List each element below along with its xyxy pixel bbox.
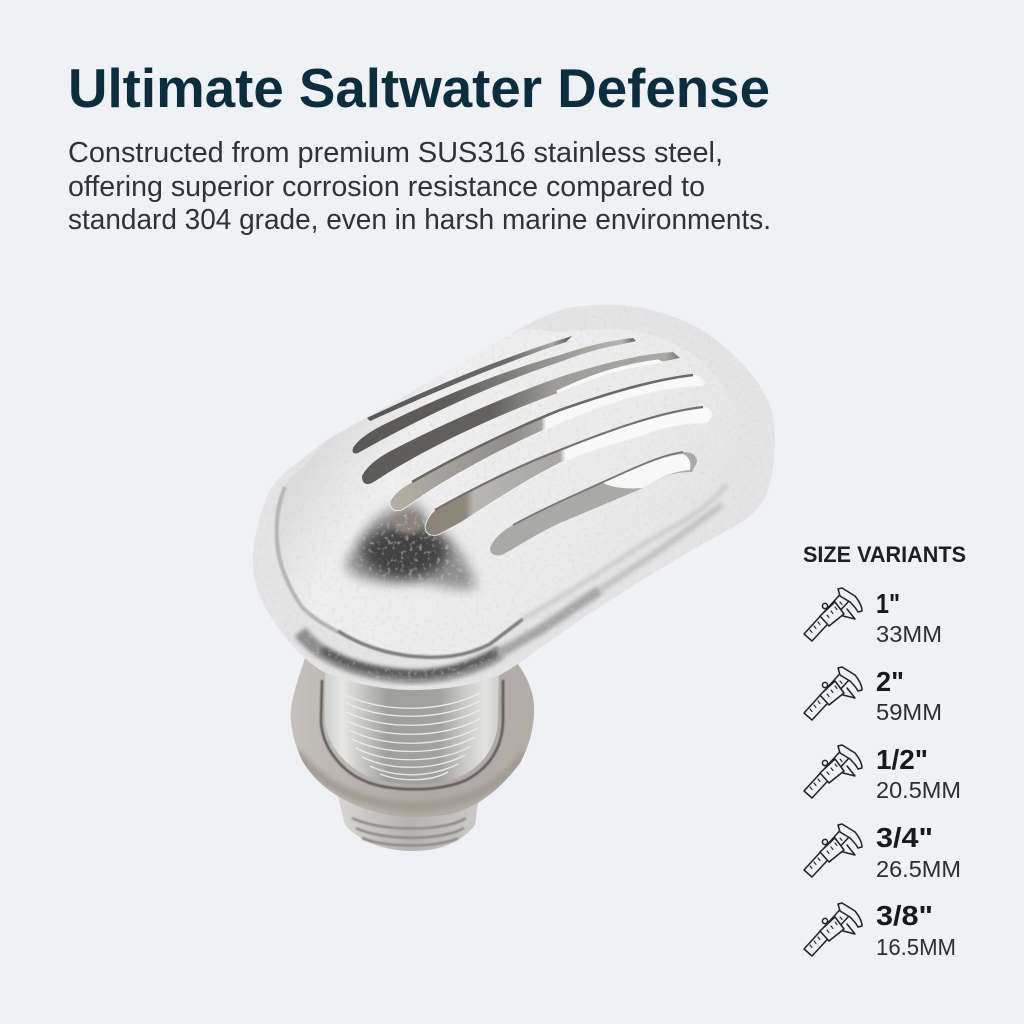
size 1 inch: [804, 588, 942, 647]
slot 4 upper shadow: [412, 375, 693, 482]
size 1 inch: 1": [876, 588, 900, 619]
size 2 inch: 59MM: [876, 699, 942, 725]
size 2 inch: 2": [876, 666, 904, 697]
slot 5 upper shadow: [435, 407, 703, 510]
groove around dome: [277, 487, 338, 632]
lower threaded stub: [336, 790, 480, 851]
size 3/8 inch: 16.5MM: [876, 934, 956, 960]
dark textured rim band: [300, 505, 722, 677]
description text: Constructed from premium SUS316 stainless steel,: [68, 137, 723, 169]
threaded shaft: [325, 665, 499, 784]
description text: offering superior corrosion resistance compared to: [68, 171, 705, 203]
size 3/4 inch: 3/4": [876, 822, 933, 853]
size 1/2 inch: [804, 744, 961, 803]
slot 3 open area: [557, 361, 660, 392]
slot 4: [390, 375, 705, 511]
size 3/8 inch: [804, 900, 956, 960]
size variants panel: [803, 542, 966, 960]
strainer head: raised dome: [277, 329, 745, 658]
slot 3: [362, 352, 680, 484]
title: Ultimate Saltwater Defense: [68, 57, 770, 119]
slot 6 upper shadow: [513, 452, 683, 525]
size 1/2 inch: 20.5MM: [876, 777, 961, 803]
size 1/2 inch: 1/2": [876, 744, 928, 775]
size 2 inch: [804, 666, 942, 725]
size 1 inch: 33MM: [876, 621, 942, 647]
grille slots: [353, 336, 712, 555]
locking nut: [290, 658, 534, 817]
size 3/4 inch: 26.5MM: [876, 856, 961, 882]
strainer head: outer flange: [253, 305, 775, 690]
description text: standard 304 grade, even in harsh marine environments.: [68, 204, 771, 236]
slot 6 open area: [603, 454, 690, 488]
size 3/4 inch: [804, 822, 961, 882]
slot 5: [425, 407, 712, 535]
description text: [68, 137, 771, 236]
size variants heading: SIZE VARIANTS: [803, 542, 966, 567]
slot 6: [490, 452, 697, 555]
slot 2: [353, 338, 636, 453]
product photo: stainless steel intake strainer: [253, 305, 775, 851]
slot 1: [367, 336, 572, 421]
size 3/8 inch: 3/8": [876, 900, 933, 931]
dome dark reflection: [345, 503, 477, 589]
